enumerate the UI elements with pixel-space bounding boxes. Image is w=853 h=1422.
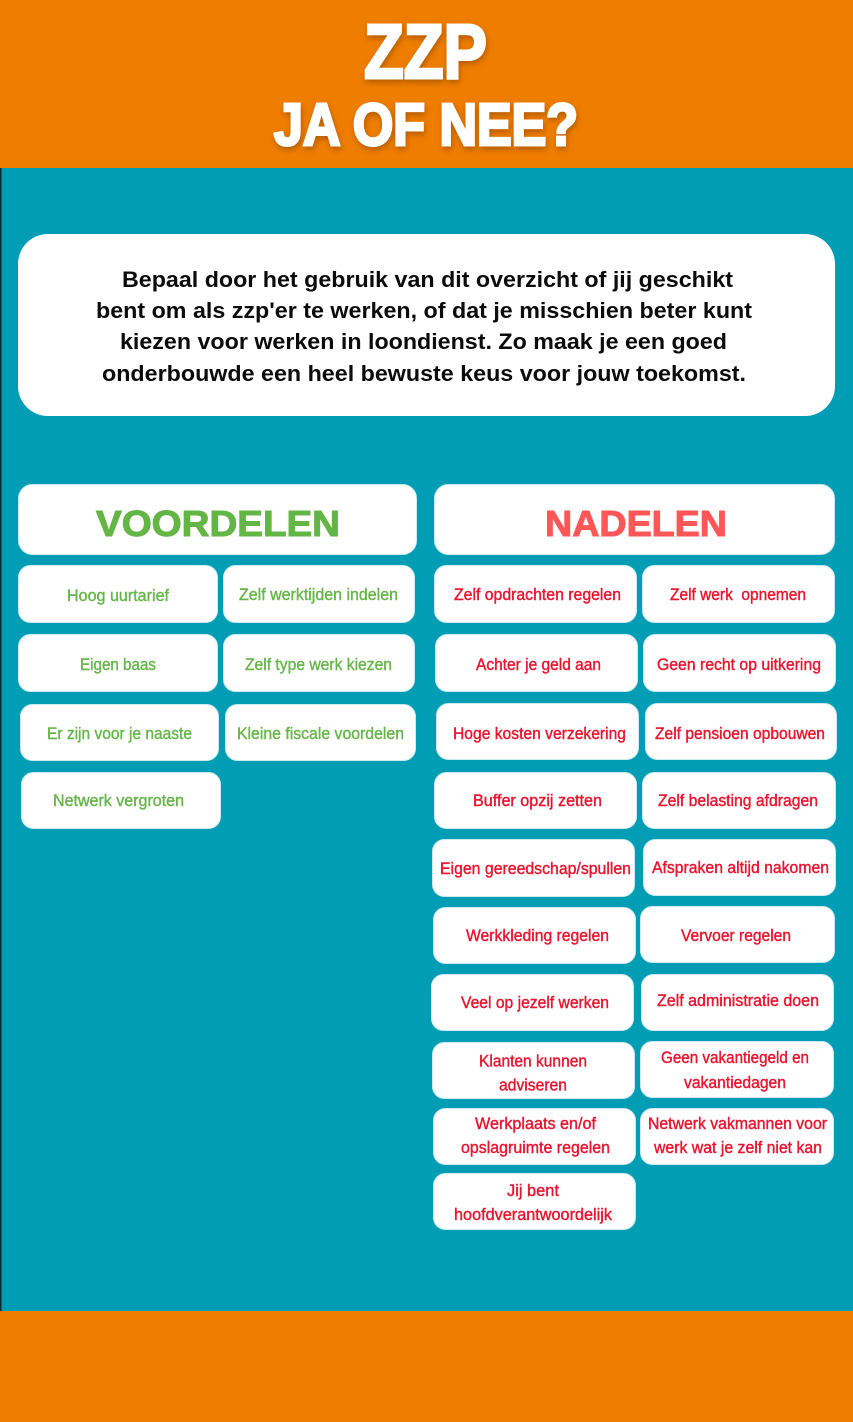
intro text: kiezen voor werken in loondienst. Zo maak je een goed (120, 329, 727, 354)
card: eigen baas: Eigen baas (80, 656, 156, 674)
title: ZZP: ZZP (364, 9, 487, 95)
card: afspraken altijd nakomen: Afspraken altijd nakomen (652, 859, 829, 877)
card: buffer opzij zetten (434, 772, 636, 828)
card: zelf opdrachten regelen: Zelf opdrachten regelen (454, 586, 621, 604)
intro text: bent om als zzp'er te werken, of dat je misschien beter kunt (96, 298, 753, 323)
card: werkplaats en/of opslagruimte regelen (434, 1108, 636, 1164)
intro text: Bepaal door het gebruik van dit overzicht of jij geschikt (122, 267, 734, 292)
card: veel op jezelf werken: Veel op jezelf werken (461, 994, 609, 1012)
panel: nadelen (432, 484, 836, 1230)
card: netwerk vergroten (22, 772, 220, 828)
subtitle: JA OF NEE?: JA OF NEE? (274, 92, 578, 158)
heading: NADELEN (434, 484, 834, 554)
header band with title (0, 0, 853, 168)
heading: VOORDELEN: VOORDELEN (96, 503, 340, 544)
card: zelf werk opnemen: Zelf werk opnemen (670, 586, 806, 604)
card: netwerk vakmannen: werk wat je zelf niet kan (653, 1139, 822, 1157)
card: zelf werk opnemen (642, 566, 834, 622)
footer band (0, 1311, 853, 1422)
card: kleine fiscale voordelen (226, 704, 416, 760)
card: zelf pensioen opbouwen (646, 704, 836, 760)
card: afspraken altijd nakomen (644, 840, 836, 896)
card: geen recht op uitkering (644, 634, 836, 692)
card: werkplaats en/of opslagruimte regelen: opslagruimte regelen (461, 1139, 610, 1157)
card: werkplaats en/of opslagruimte regelen: Werkplaats en/of (475, 1115, 596, 1133)
card: werkkleding regelen (434, 908, 636, 964)
card: vervoer regelen (640, 906, 834, 962)
panel: introduction (18, 234, 835, 416)
card: netwerk vergroten: Netwerk vergroten (53, 792, 184, 810)
card: zelf pensioen opbouwen: Zelf pensioen opbouwen (655, 725, 825, 743)
card: hoog uurtarief (18, 566, 218, 622)
card: hoge kosten verzekering: Hoge kosten verzekering (453, 725, 626, 743)
card: zelf type werk kiezen (224, 634, 414, 692)
card: eigen gereedschap/spullen: Eigen gereedschap/spullen (440, 860, 631, 878)
card: buffer opzij zetten: Buffer opzij zetten (473, 792, 602, 810)
card: jij bent hoofdverantwoordelijk: hoofdverantwoordelijk (454, 1206, 613, 1224)
card: zelf administratie doen: Zelf administratie doen (657, 992, 819, 1010)
card: er zijn voor je naaste (20, 704, 218, 760)
card: veel op jezelf werken (432, 974, 634, 1030)
card: zelf administratie doen (642, 974, 834, 1030)
card: zelf opdrachten regelen (434, 566, 636, 622)
card: achter je geld aan (436, 634, 638, 692)
card: klanten kunnen adviseren: adviseren (499, 1076, 567, 1094)
card: zelf type werk kiezen: Zelf type werk kiezen (245, 656, 392, 674)
heading: NADELEN: NADELEN (545, 503, 727, 544)
card: zelf belasting afdragen (642, 772, 836, 828)
card: jij bent hoofdverantwoordelijk (434, 1174, 636, 1230)
card: klanten kunnen adviseren: Klanten kunnen (479, 1052, 587, 1070)
card: zelf belasting afdragen: Zelf belasting afdragen (658, 792, 818, 810)
intro text: onderbouwde een heel bewuste keus voor jouw toekomst. (102, 361, 746, 386)
card: hoog uurtarief: Hoog uurtarief (67, 587, 169, 605)
card: er zijn voor je naaste: Er zijn voor je naaste (47, 725, 192, 743)
panel: voordelen (18, 484, 416, 828)
card: werkkleding regelen: Werkkleding regelen (466, 927, 609, 945)
card: zelf werktijden indelen (224, 566, 414, 622)
card: zelf werktijden indelen: Zelf werktijden indelen (239, 586, 398, 604)
card: kleine fiscale voordelen: Kleine fiscale voordelen (237, 725, 404, 743)
intro text (96, 267, 753, 386)
card: hoge kosten verzekering (436, 704, 638, 760)
heading: VOORDELEN (18, 484, 416, 554)
card: klanten kunnen adviseren (432, 1042, 634, 1098)
card: vervoer regelen: Vervoer regelen (681, 927, 791, 945)
card: geen vakantiegeld en vakantiedagen (640, 1042, 834, 1098)
card: geen vakantiegeld en vakantiedagen: Geen vakantiegeld en (661, 1049, 809, 1067)
card: eigen gereedschap/spullen (432, 840, 634, 896)
card: netwerk vakmannen (640, 1108, 834, 1164)
card: geen vakantiegeld en vakantiedagen: vakantiedagen (684, 1074, 786, 1092)
card: geen recht op uitkering: Geen recht op uitkering (657, 656, 821, 674)
card: netwerk vakmannen: Netwerk vakmannen voor (648, 1115, 827, 1133)
card: achter je geld aan: Achter je geld aan (476, 656, 601, 674)
card: jij bent hoofdverantwoordelijk: Jij bent (507, 1182, 559, 1200)
card: eigen baas (18, 634, 218, 692)
